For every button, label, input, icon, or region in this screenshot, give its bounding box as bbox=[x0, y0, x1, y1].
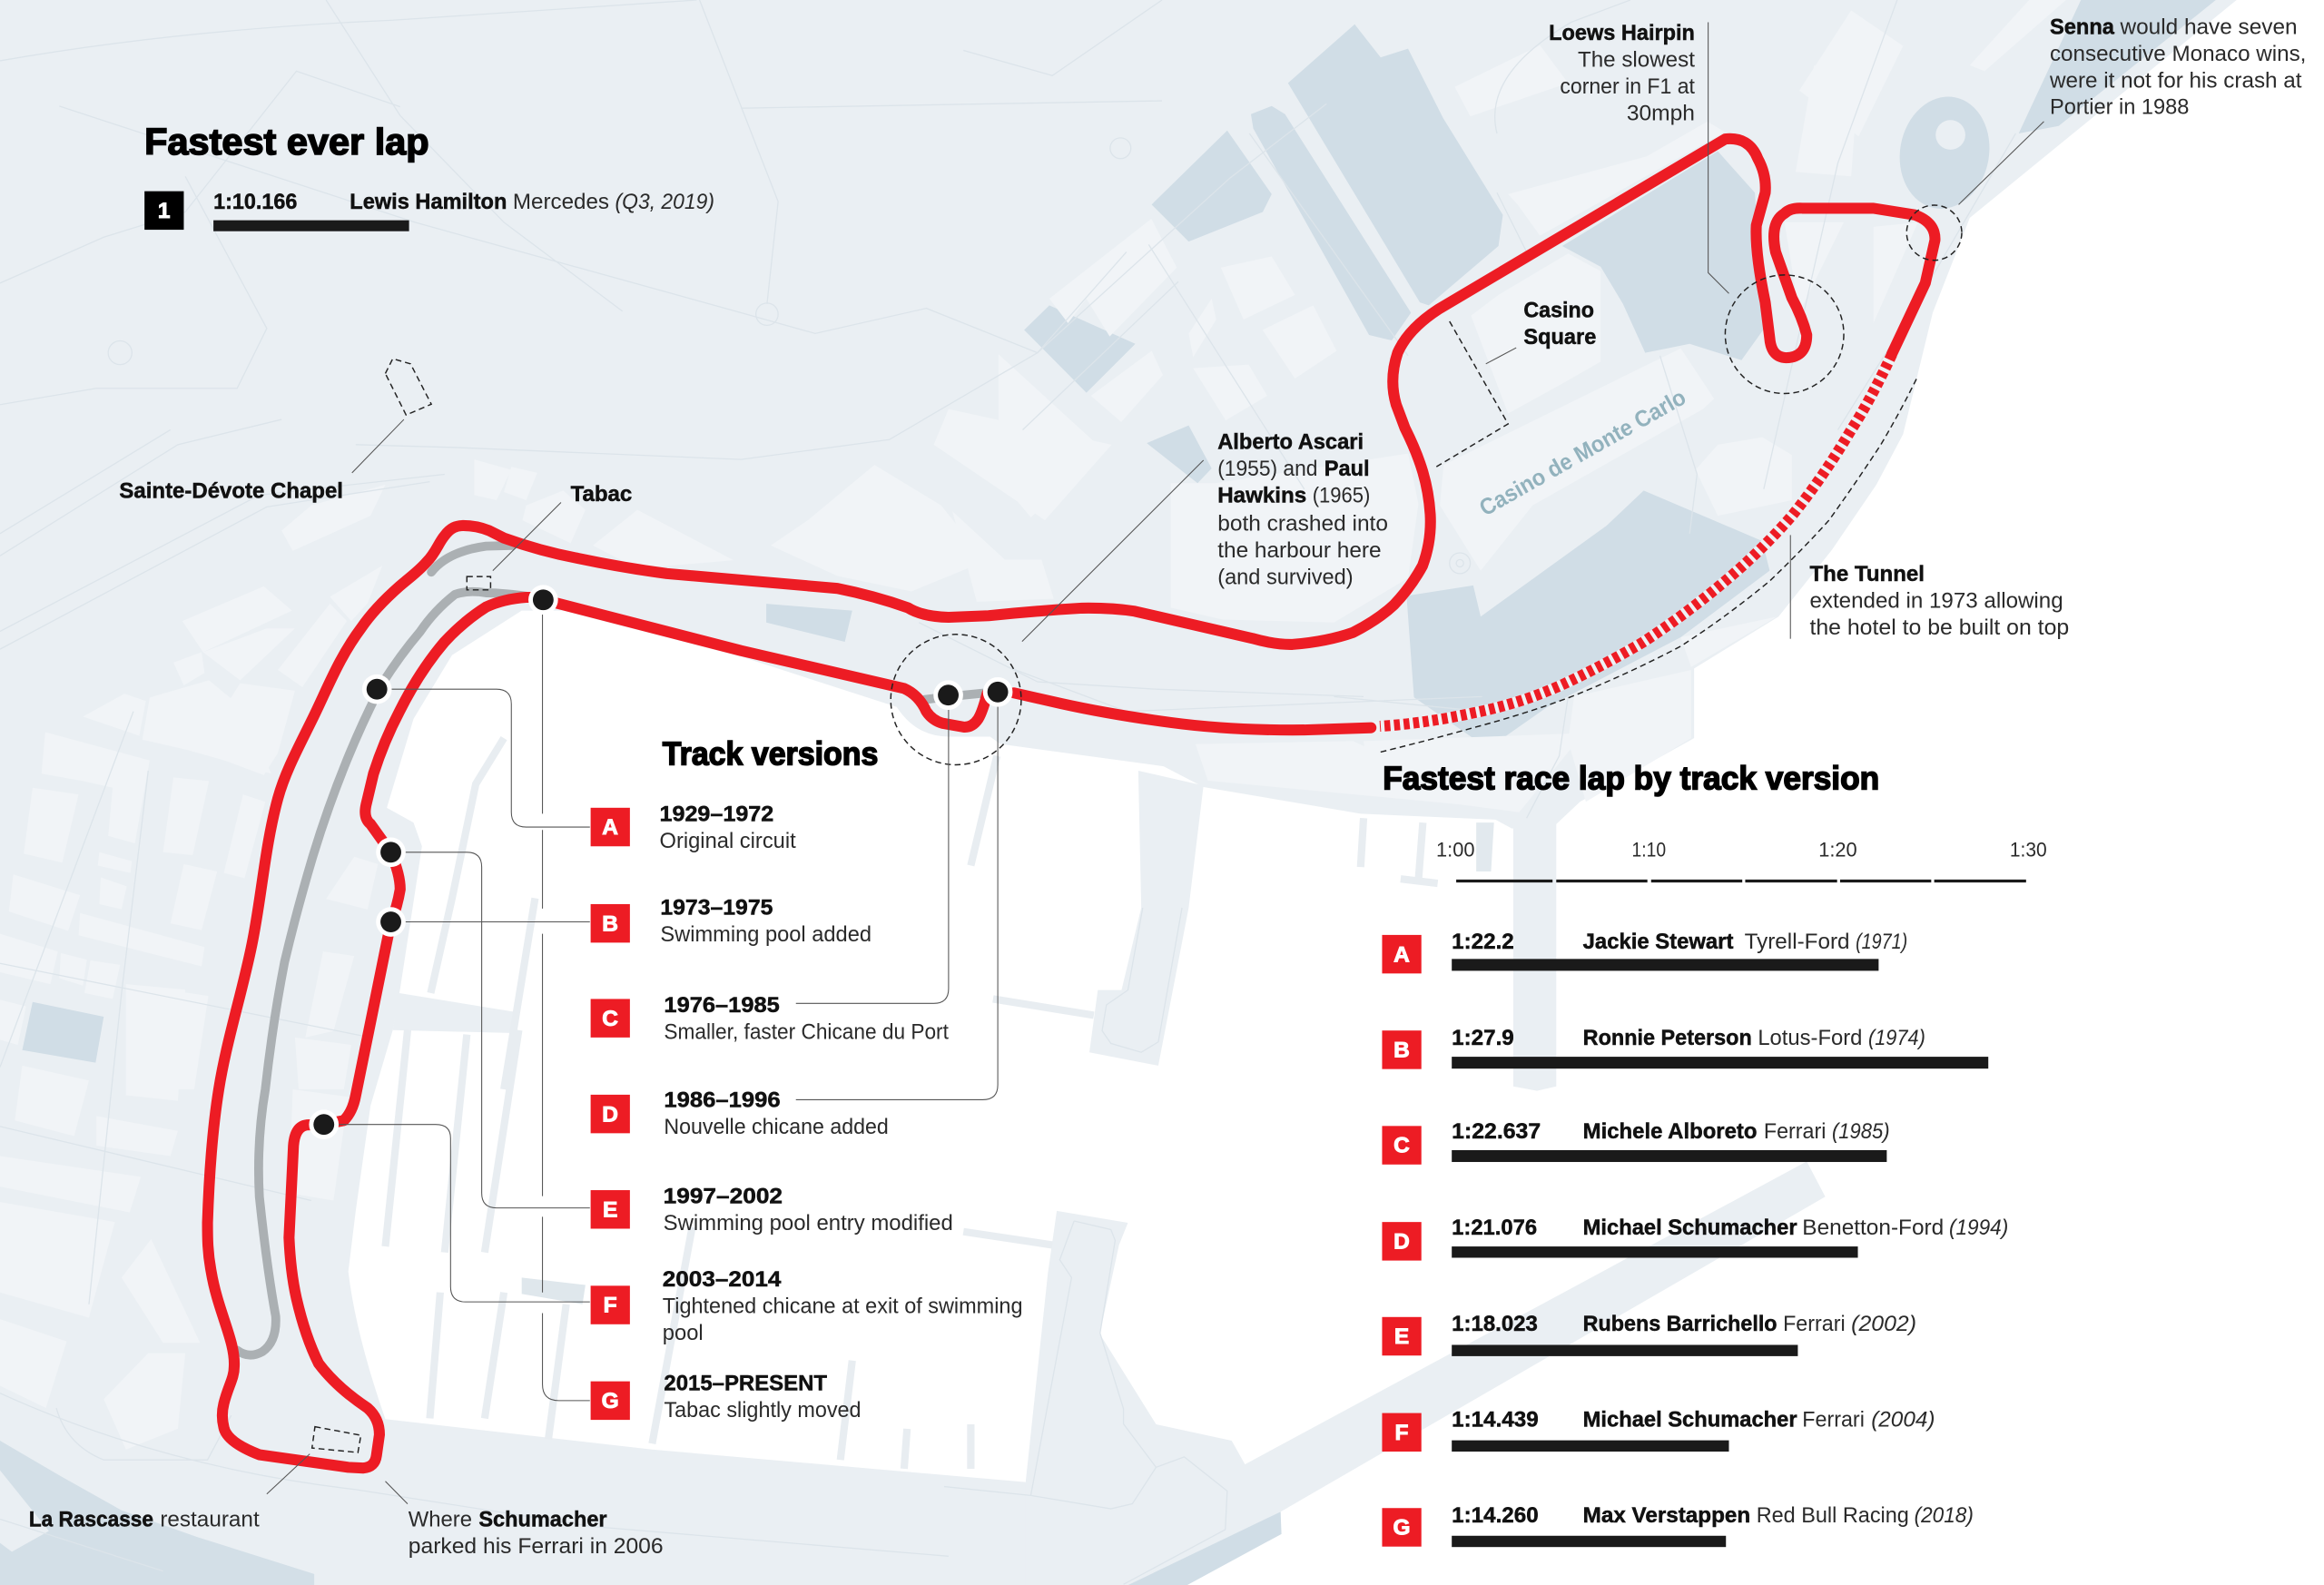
row G: G bbox=[1393, 1516, 1411, 1541]
row G: Max Verstappen bbox=[1583, 1503, 1750, 1528]
version E: E bbox=[603, 1197, 617, 1222]
version F bbox=[591, 1267, 1023, 1345]
row F: (2004) bbox=[1871, 1407, 1935, 1432]
note: Ascari and Hawkins: Hawkins bbox=[1217, 483, 1306, 507]
note: Schumacher parking bbox=[409, 1508, 664, 1559]
row B: Lotus-Ford bbox=[1758, 1026, 1862, 1050]
track point markers bbox=[309, 585, 1012, 1139]
row G: (2018) bbox=[1915, 1503, 1974, 1528]
version B bbox=[591, 895, 872, 947]
row G: Red Bull Racing bbox=[1757, 1503, 1909, 1528]
version C bbox=[591, 993, 949, 1045]
version D: D bbox=[602, 1102, 618, 1127]
note: Senna: Portier in 1988 bbox=[2050, 95, 2189, 120]
row B: 1:27.9 bbox=[1452, 1026, 1514, 1050]
fastest ever lap row: 1:10.166 bbox=[213, 190, 297, 214]
note: Ascari and Hawkins: (1955) and bbox=[1217, 457, 1317, 481]
label: La Rascasse: La Rascasse bbox=[29, 1508, 153, 1532]
row A: Tyrell-Ford bbox=[1745, 930, 1850, 954]
version G: Tabac slightly moved bbox=[664, 1398, 862, 1423]
row B: Ronnie Peterson bbox=[1583, 1026, 1752, 1050]
note: Schumacher parking: parked his Ferrari in 2006 bbox=[409, 1534, 664, 1559]
row E: Rubens Barrichello bbox=[1583, 1312, 1777, 1336]
row F: Michael Schumacher bbox=[1583, 1407, 1797, 1432]
map: roundabout island bbox=[1935, 120, 1965, 150]
label: Casino Square: Square bbox=[1523, 325, 1596, 349]
version A: 1929–1972 bbox=[660, 802, 773, 827]
note: Senna: Senna bbox=[2050, 15, 2114, 40]
row A bbox=[1382, 930, 1907, 973]
note: The Tunnel: extended in 1973 allowing bbox=[1809, 588, 2063, 613]
note: Ascari and Hawkins: the harbour here bbox=[1217, 538, 1382, 563]
version E: Swimming pool entry modified bbox=[664, 1211, 953, 1236]
version F: F bbox=[604, 1294, 617, 1318]
version G: 2015–PRESENT bbox=[664, 1371, 827, 1395]
version F: Tightened chicane at exit of swimming bbox=[663, 1295, 1023, 1319]
version G: G bbox=[602, 1389, 619, 1413]
fastest ever lap row: Mercedes bbox=[513, 190, 609, 214]
row E: (2002) bbox=[1851, 1312, 1916, 1336]
label: Sainte-Dévote Chapel: Sainte-Dévote Chapel bbox=[119, 479, 343, 504]
current track in red bbox=[208, 139, 1935, 1468]
row D: Benetton-Ford bbox=[1802, 1216, 1944, 1240]
label: Tabac: Tabac bbox=[571, 482, 632, 507]
row B bbox=[1382, 1026, 1988, 1069]
row E bbox=[1382, 1312, 1916, 1356]
map: dark water bottom left bbox=[0, 1441, 314, 1585]
row D: (1994) bbox=[1949, 1216, 2008, 1240]
map: quays, piers and breakwater bbox=[385, 738, 1826, 1585]
row A: (1971) bbox=[1856, 930, 1907, 954]
version C: Smaller, faster Chicane du Port bbox=[664, 1020, 949, 1045]
heading: Track versions: Track versions bbox=[663, 734, 878, 772]
row A: Jackie Stewart bbox=[1583, 930, 1733, 954]
version C: C bbox=[602, 1007, 618, 1031]
note: Loews Hairpin bbox=[1549, 21, 1695, 125]
heading: Fastest ever lap: Fastest ever lap bbox=[144, 121, 429, 162]
label: Casino de Monte Carlo: Casino de Monte Carlo bbox=[1475, 385, 1690, 521]
chart axis: 1:00 bbox=[1436, 839, 1474, 861]
note: Loews Hairpin: 30mph bbox=[1627, 101, 1695, 125]
row G: 1:14.260 bbox=[1452, 1503, 1539, 1528]
note: Ascari and Hawkins: Alberto Ascari bbox=[1217, 430, 1364, 455]
annotation leader lines bbox=[267, 23, 2043, 1504]
row F: Ferrari bbox=[1802, 1407, 1865, 1432]
note: Ascari and Hawkins: both crashed into bbox=[1217, 512, 1388, 537]
row B: (1974) bbox=[1868, 1026, 1925, 1050]
row C bbox=[1382, 1119, 1890, 1165]
note: Schumacher parking: Schumacher bbox=[478, 1508, 607, 1532]
fastest ever lap row: 1 bbox=[158, 199, 171, 223]
note: Loews Hairpin: corner in F1 at bbox=[1560, 74, 1695, 99]
version D bbox=[591, 1088, 889, 1139]
row C: C bbox=[1393, 1134, 1410, 1158]
row F: F bbox=[1395, 1421, 1409, 1445]
fastest ever lap row: Lewis Hamilton bbox=[350, 190, 507, 214]
note: Ascari and Hawkins: (1965) bbox=[1313, 483, 1370, 507]
version B: Swimming pool added bbox=[660, 922, 872, 947]
note: Senna bbox=[2049, 15, 2306, 120]
label: La Rascasse: restaurant bbox=[160, 1508, 260, 1532]
map: dark building blocks bbox=[22, 0, 2216, 1063]
row C: Ferrari bbox=[1764, 1119, 1826, 1144]
note: Senna: would have seven bbox=[2120, 15, 2298, 40]
row C: (1985) bbox=[1832, 1119, 1890, 1144]
version G bbox=[591, 1371, 862, 1423]
note: The Tunnel bbox=[1809, 562, 2069, 640]
version D: Nouvelle chicane added bbox=[664, 1115, 889, 1139]
label: Casino Square: Casino bbox=[1523, 298, 1594, 322]
chart axis bbox=[1436, 839, 2047, 881]
version A: Original circuit bbox=[660, 829, 796, 853]
row C: 1:22.637 bbox=[1452, 1119, 1541, 1144]
label: La Rascasse bbox=[29, 1508, 260, 1532]
chart axis: 1:30 bbox=[2010, 839, 2047, 861]
version E bbox=[591, 1185, 953, 1236]
heading: Fastest race lap by track version: Fastest race lap by track version bbox=[1383, 759, 1879, 796]
old track layout in grey bbox=[237, 546, 993, 1355]
fastest ever lap row bbox=[144, 190, 714, 231]
row E: E bbox=[1394, 1324, 1409, 1349]
track versions list bbox=[591, 802, 1023, 1423]
row D: 1:21.076 bbox=[1452, 1216, 1537, 1240]
row D: D bbox=[1393, 1230, 1410, 1255]
note: Ascari and Hawkins: (and survived) bbox=[1217, 565, 1354, 589]
note: The Tunnel: The Tunnel bbox=[1809, 562, 1925, 586]
row G bbox=[1382, 1503, 1974, 1547]
note: Loews Hairpin: Loews Hairpin bbox=[1549, 21, 1695, 45]
dashed location markers bbox=[312, 205, 1962, 1452]
note: Senna: were it not for his crash at bbox=[2049, 68, 2302, 93]
version A bbox=[591, 802, 796, 853]
row A: A bbox=[1393, 942, 1410, 967]
row B: B bbox=[1393, 1039, 1410, 1063]
version C: 1976–1985 bbox=[664, 993, 780, 1018]
chart axis: 1:10 bbox=[1632, 839, 1666, 861]
note: The Tunnel: the hotel to be built on top bbox=[1809, 615, 2069, 640]
version B: 1973–1975 bbox=[660, 895, 773, 920]
chart axis: 1:20 bbox=[1818, 839, 1857, 861]
note: Schumacher parking: Where bbox=[409, 1508, 472, 1532]
version D: 1986–1996 bbox=[664, 1088, 781, 1113]
note: Ascari and Hawkins: Paul bbox=[1324, 457, 1370, 481]
version F: pool bbox=[663, 1321, 704, 1345]
note: Senna: consecutive Monaco wins, bbox=[2050, 42, 2306, 66]
row D: Michael Schumacher bbox=[1583, 1216, 1797, 1240]
note: Loews Hairpin: The slowest bbox=[1578, 47, 1695, 72]
connector lines from track points to version badges bbox=[338, 607, 998, 1401]
row E: 1:18.023 bbox=[1452, 1312, 1538, 1336]
row D bbox=[1382, 1216, 2008, 1261]
row C: Michele Alboreto bbox=[1583, 1119, 1758, 1144]
version E: 1997–2002 bbox=[664, 1185, 783, 1209]
bar chart: fastest race lap by version bbox=[1382, 930, 2008, 1547]
row E: Ferrari bbox=[1783, 1312, 1846, 1336]
version B: B bbox=[602, 911, 618, 936]
version A: A bbox=[602, 815, 618, 840]
note: Ascari and Hawkins bbox=[1217, 430, 1388, 589]
label: Casino Square bbox=[1523, 298, 1596, 349]
row A: 1:22.2 bbox=[1452, 930, 1514, 954]
row F: 1:14.439 bbox=[1452, 1407, 1539, 1432]
version F: 2003–2014 bbox=[663, 1267, 782, 1292]
row F bbox=[1382, 1407, 1935, 1452]
fastest ever lap row: (Q3, 2019) bbox=[615, 190, 714, 214]
